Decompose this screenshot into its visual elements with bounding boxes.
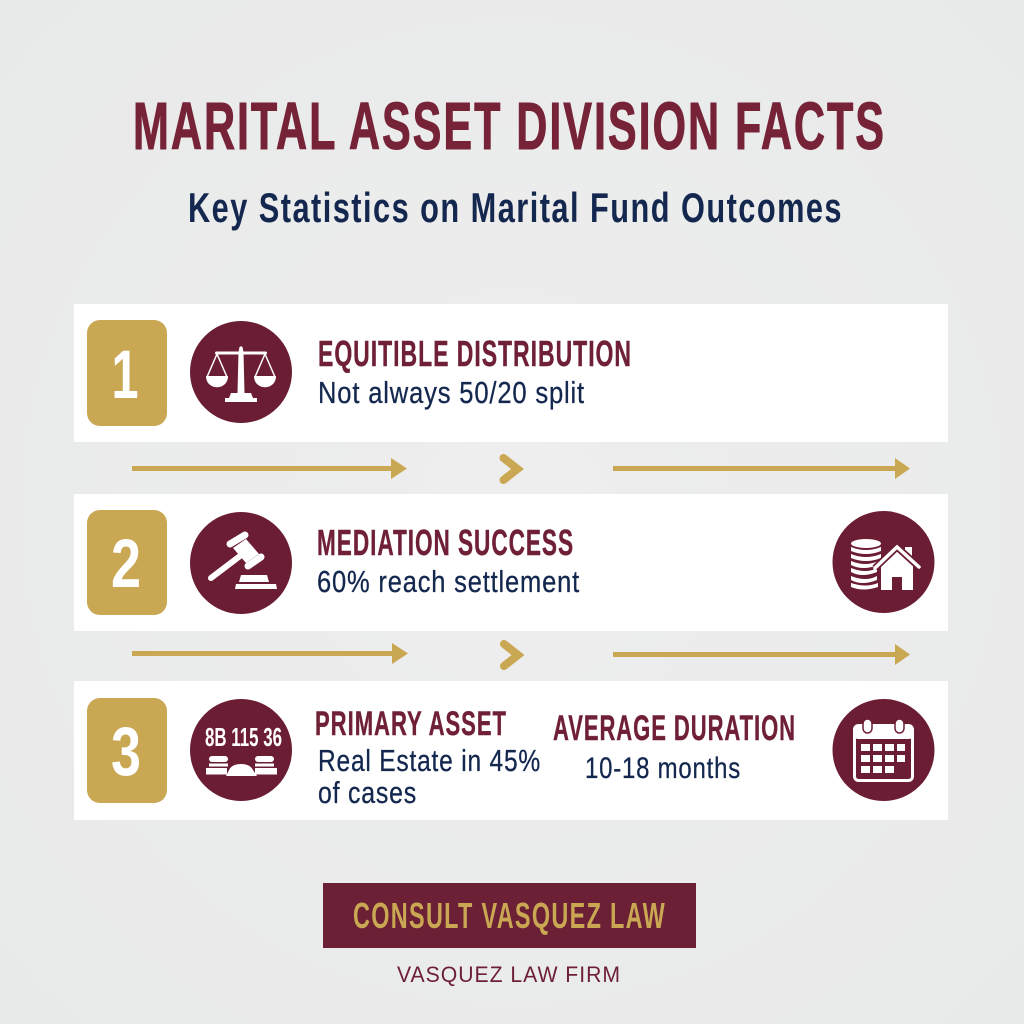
heading: average duration: AVERAGE DURATION — [553, 709, 796, 748]
stat text: duration: 10-18 months — [585, 752, 741, 785]
stat text: 60% reach settlement — [317, 564, 580, 599]
call to action button — [323, 883, 696, 948]
stat text: real estate: Real Estate in 45% — [318, 743, 541, 778]
stat text: Not always 50/20 split — [318, 375, 585, 410]
number badge 3 — [87, 698, 167, 803]
icon: coins and house — [832, 511, 934, 613]
stat text: real estate — [318, 743, 541, 810]
panel: mediation success — [74, 494, 948, 631]
heading: MEDIATION SUCCESS — [317, 522, 574, 563]
arrows row 2 — [132, 643, 910, 666]
heading: primary asset: PRIMARY ASSET — [315, 705, 507, 743]
number badge 2: 2 — [111, 525, 141, 602]
number badge 3: 3 — [111, 713, 141, 790]
stat text: real estate: of cases — [318, 775, 417, 810]
number badge 1 — [87, 320, 167, 426]
number badge 2 — [87, 510, 167, 615]
icon: gavel — [190, 512, 292, 614]
call to action button: CONSULT VASQUEZ LAW — [353, 895, 666, 936]
panel: equitable distribution — [74, 304, 948, 442]
heading: EQUITIBLE DISTRIBUTION — [318, 333, 632, 374]
footer firm name: VASQUEZ LAW FIRM — [397, 962, 621, 987]
icon: calendar — [832, 699, 934, 801]
number badge 1: 1 — [112, 336, 138, 413]
icon: scales — [190, 321, 292, 423]
panel: primary asset and duration — [74, 681, 948, 820]
icon: asset figures: 8B 115 36 — [205, 722, 282, 752]
icon: asset figures — [190, 699, 292, 801]
arrows row 1 — [132, 458, 910, 480]
